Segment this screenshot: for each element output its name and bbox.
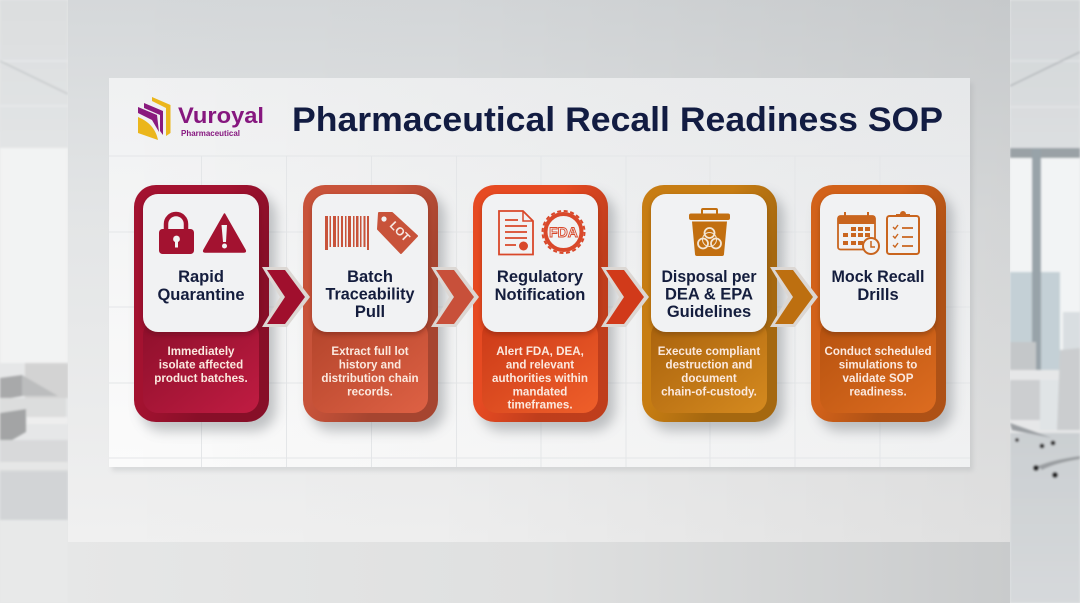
heading card: Guidelines: [667, 303, 751, 321]
description panel: [651, 320, 767, 413]
description panel: chain-of-custody.: [661, 386, 757, 398]
heading card: Pull: [355, 303, 385, 321]
heading card: Batch: [347, 268, 393, 286]
heading card: Drills: [857, 286, 899, 304]
left office room with sofa: [0, 0, 68, 603]
description panel: validate SOP: [843, 372, 914, 385]
panel: step 5 Mock Recall Drills: [811, 185, 953, 431]
heading card: [820, 194, 936, 335]
description panel: Conduct scheduled: [824, 345, 932, 358]
description panel: [482, 320, 598, 413]
description panel: Immediately: [167, 345, 235, 358]
description panel: timeframes.: [507, 398, 573, 412]
description panel: Execute compliant: [658, 345, 760, 358]
brand tagline: Pharmaceutical: [181, 129, 240, 138]
heading card: Disposal per: [662, 268, 757, 286]
description panel: and relevant: [506, 358, 574, 372]
icon: checklist clipboard: [887, 211, 919, 254]
icon: barcode: [325, 216, 369, 250]
description panel: records.: [347, 386, 393, 398]
icon: LOT tag: [378, 213, 417, 253]
heading card: Notification: [495, 286, 585, 304]
heading card: [312, 194, 428, 335]
icon: warning triangle: [204, 214, 245, 252]
brand name: Vuroyal: [178, 103, 264, 128]
arrow: step 1 to 2: [262, 267, 310, 327]
description panel: destruction and: [666, 358, 752, 372]
icon: calendar with clock: [838, 212, 879, 254]
arrow fill: step 2 to 3: [436, 270, 474, 324]
description panel: document: [681, 372, 737, 385]
description panel: mandated: [513, 386, 567, 398]
description panel: product batches.: [154, 372, 248, 385]
panel: step 3 Regulatory Notification: [473, 185, 615, 431]
panel: step 1 Rapid Quarantine: [134, 185, 276, 431]
description panel: Alert FDA, DEA,: [496, 345, 584, 358]
heading card: Traceability: [326, 286, 415, 304]
description panel: [143, 320, 259, 413]
heading card: [143, 194, 259, 335]
title: Pharmaceutical Recall Readiness SOP: [292, 101, 943, 139]
heading card: Regulatory: [497, 268, 584, 286]
icon: biohazard bin: [689, 209, 730, 256]
description panel: simulations to: [839, 358, 917, 372]
description panel: authorities within: [492, 372, 588, 385]
panel: step 4 Disposal per DEA & EPA Guidelines: [642, 185, 784, 431]
logo: Vuroyal Pharmaceutical: [138, 97, 264, 140]
heading card: [651, 194, 767, 335]
description panel: isolate affected: [159, 358, 243, 372]
arrow: step 3 to 4: [601, 267, 649, 327]
description panel: [312, 320, 428, 413]
icon: logo mark: [138, 97, 170, 140]
heading card: Rapid: [178, 268, 224, 286]
heading card: DEA & EPA: [665, 286, 753, 304]
heading card: Mock Recall: [832, 268, 924, 286]
arrow fill: step 4 to 5: [775, 270, 813, 324]
description panel: distribution chain: [321, 372, 419, 385]
arrow fill: step 1 to 2: [267, 270, 305, 324]
arrow: step 4 to 5: [770, 267, 818, 327]
panel: step 2 Batch Traceability Pull: [303, 185, 445, 431]
description panel: history and: [339, 358, 401, 372]
description panel: readiness.: [849, 386, 907, 398]
arrow: step 2 to 3: [431, 267, 479, 327]
icon: LOT tag: LOT: [387, 220, 412, 244]
icon: padlock: [159, 214, 194, 254]
panel: main board: [109, 78, 973, 471]
icon: document with seal: [499, 211, 533, 254]
icon: FDA seal: FDA: [549, 224, 578, 240]
right office room with window and chairs: [1010, 0, 1080, 603]
description panel: [820, 320, 936, 413]
heading card: [482, 194, 598, 335]
heading card: Quarantine: [157, 286, 245, 304]
icon: FDA seal: [542, 211, 584, 253]
description panel: Extract full lot: [331, 345, 409, 358]
arrow fill: step 3 to 4: [606, 270, 644, 324]
